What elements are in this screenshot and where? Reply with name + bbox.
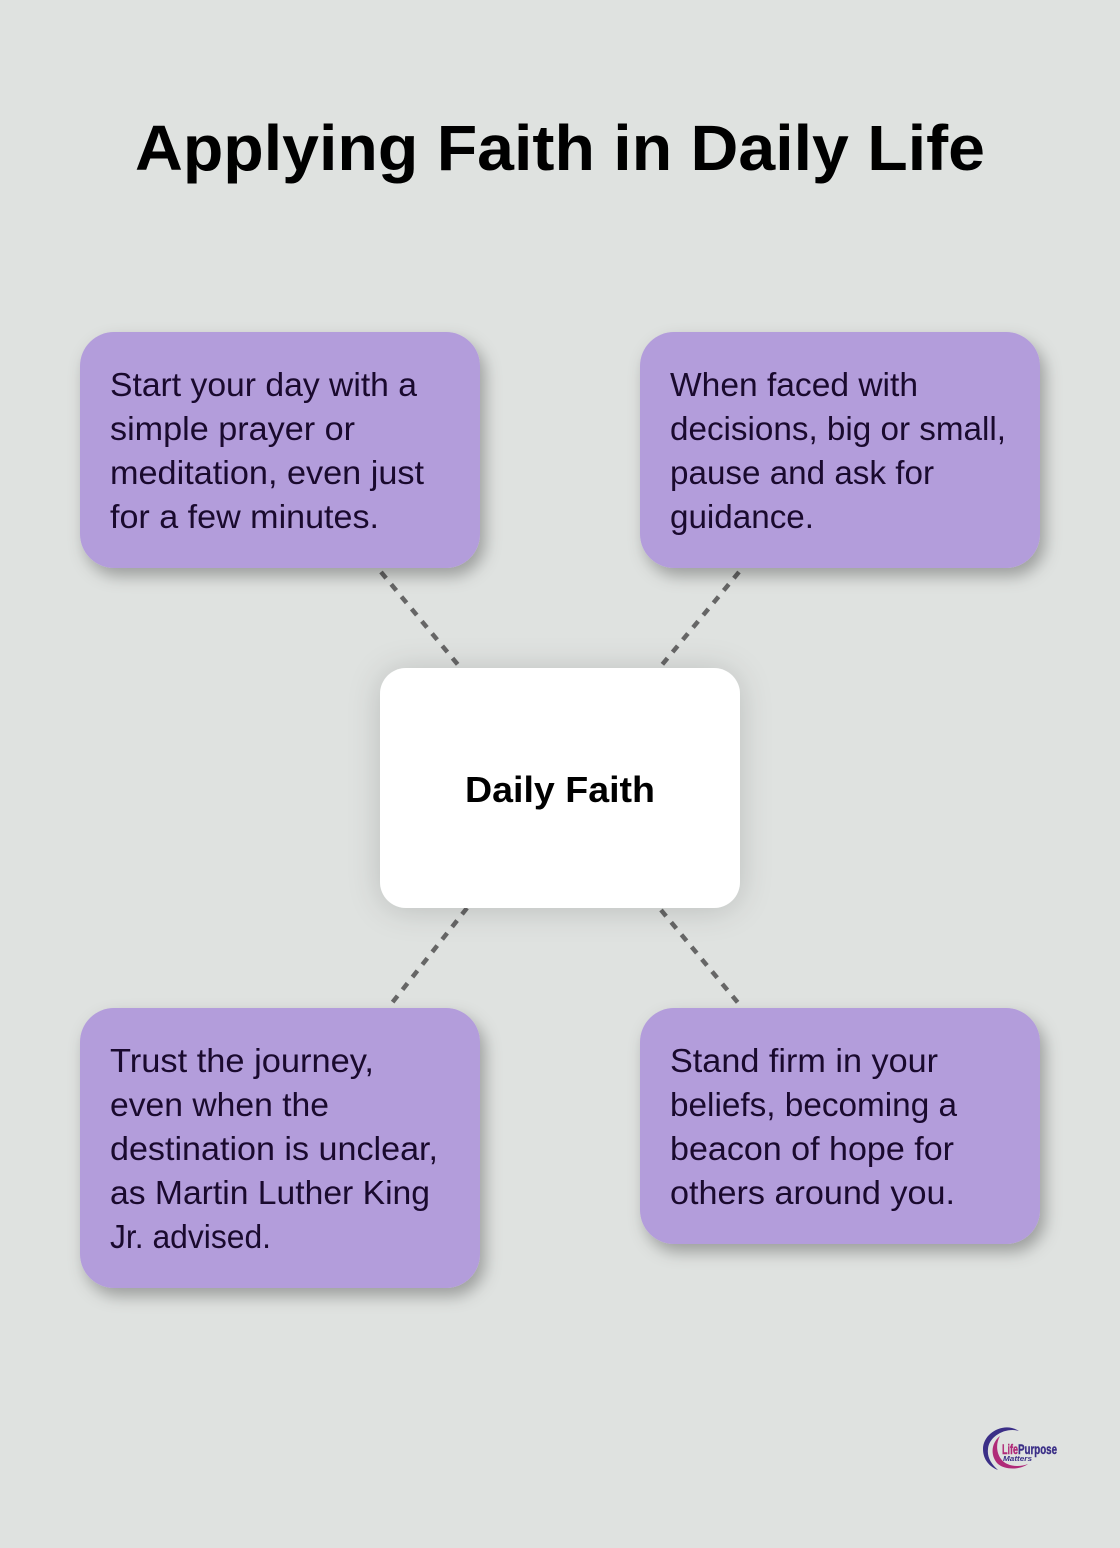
- icon: life purpose matters logo: Purpose: [1018, 1441, 1057, 1457]
- panel: trust the journey: as Martin Luther King: [110, 1174, 430, 1211]
- panel: stand firm: [640, 1008, 1040, 1244]
- icon: life purpose matters logo: [983, 1427, 1057, 1470]
- panel: decisions: pause and ask for: [670, 454, 934, 491]
- panel: stand firm: others around you.: [670, 1174, 955, 1211]
- icon: life purpose matters logo: Life: [1002, 1441, 1018, 1457]
- panel: stand firm: Stand firm in your: [670, 1042, 938, 1079]
- panel: start your day: simple prayer or: [110, 410, 355, 447]
- panel: start your day: for a few minutes.: [110, 498, 379, 535]
- title: Applying Faith in Daily Life: [135, 112, 985, 184]
- icon: life purpose matters logo: Matters: [1003, 1456, 1032, 1463]
- panel: trust the journey: destination is unclear,: [110, 1130, 438, 1167]
- panel: trust the journey: Trust the journey,: [110, 1042, 374, 1079]
- panel: decisions: [640, 332, 1040, 568]
- panel: trust the journey: [80, 1008, 480, 1288]
- panel: center daily faith: [380, 668, 740, 908]
- panel: stand firm: beacon of hope for: [670, 1130, 954, 1167]
- panel: center daily faith: Daily Faith: [465, 769, 655, 810]
- panel: start your day: Start your day with a: [110, 366, 418, 403]
- panel: start your day: meditation, even just: [110, 454, 424, 491]
- panel: decisions: guidance.: [670, 498, 814, 535]
- panel: decisions: decisions, big or small,: [670, 410, 1006, 447]
- panel: trust the journey: even when the: [110, 1086, 329, 1123]
- panel: decisions: When faced with: [670, 366, 918, 403]
- dashed connector lines: [381, 572, 739, 1008]
- panel: stand firm: beliefs, becoming a: [670, 1086, 958, 1123]
- panel: trust the journey: Jr. advised.: [110, 1218, 271, 1255]
- panel: start your day: [80, 332, 480, 568]
